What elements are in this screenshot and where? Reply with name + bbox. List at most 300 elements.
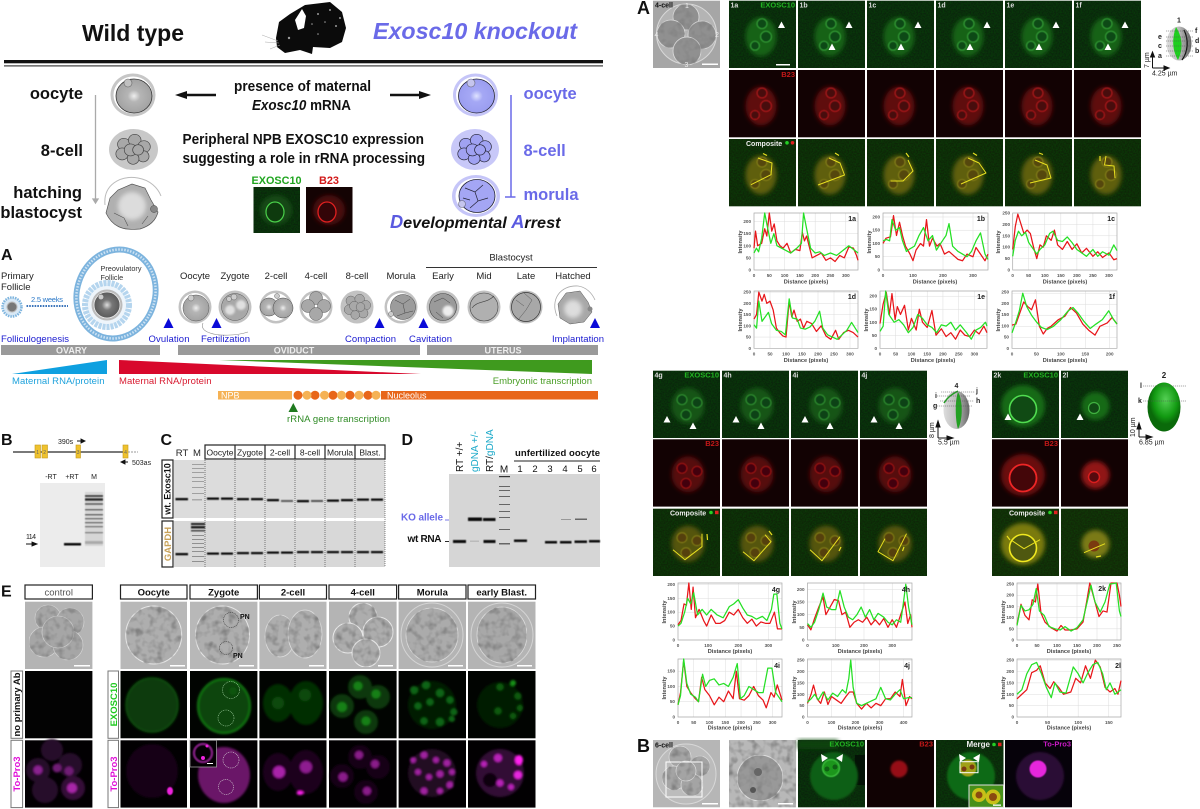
heading: Blastocyst: Blastocyst (489, 252, 533, 264)
icon: wild type 8-cell (109, 129, 158, 170)
icon: mid blastocyst (468, 290, 500, 324)
panel E: EXOSC10 immunostaining across stages (1, 584, 536, 808)
diagram: nucleus 4 slices: 4 (955, 383, 959, 390)
image: 4-cell embryo: 4-cell (655, 2, 673, 10)
profile chart: 2k: 150 (1073, 643, 1081, 648)
profile chart: 2k: 2k (1098, 586, 1106, 593)
chart: profile 1b: 0 (877, 268, 880, 272)
chart: profile 1f: 250 (1001, 290, 1009, 295)
chart: profile 4j (792, 658, 912, 732)
chart: profile 1b: 100 (872, 241, 880, 246)
image row: B23 series (729, 70, 1141, 137)
image: merge (936, 740, 1004, 807)
profile chart: 2k: 0 (1016, 643, 1019, 648)
chart: profile 4j: 100 (797, 692, 805, 697)
image row: EXOSC10 series 4g-4j: 4i (792, 372, 798, 380)
image: 4-cell embryo: 3 (685, 62, 689, 69)
diagram: gene model: 503as (132, 460, 152, 467)
labels: embryo stages: Oocyte (180, 271, 210, 282)
diagram: gene model (13, 439, 152, 467)
profile chart: 2l (1001, 658, 1121, 732)
chart: profile 1c: 50 (1005, 256, 1010, 261)
chart: profile 1f: 200 (1106, 351, 1114, 356)
profile chart: 2l: Distance (pixels) (1047, 726, 1091, 732)
labels: RT and M lanes: RT (176, 448, 188, 459)
chart: profile 1b: Intensity (867, 230, 873, 254)
chart: profile 1b (867, 213, 988, 286)
text: presence of maternal Exosc10 mRNA: Exosc10 mRNA (252, 97, 351, 114)
chart: profile 4j: 50 (799, 703, 805, 708)
labels: developmental events: Cavitation (409, 334, 452, 345)
icon: hatching blastocyst (105, 177, 161, 229)
profile chart: 2k: 150 (1006, 604, 1014, 609)
image row: EXOSC10 series 1a-1f: 1a (730, 2, 738, 10)
chart: profile 1c: 100 (1002, 245, 1010, 250)
chart: profile 1f: Distance (pixels) (1043, 358, 1087, 364)
chart: profile 1a: Distance (pixels) (784, 280, 828, 286)
chart: profile 1d: Distance (pixels) (784, 358, 828, 364)
panel letter E: E (1, 584, 12, 600)
chart: profile 4j: 4j (904, 663, 910, 670)
profile chart: 2l: 250 (1006, 658, 1014, 663)
chart: profile 4i: 150 (721, 720, 730, 725)
profile charts: 4g to 4j (662, 582, 912, 732)
headers: stages: 4-cell (351, 588, 375, 598)
arrow: 2.5 weeks: 2.5 weeks (31, 295, 63, 304)
labels: developmental events: Folliculogenesis (1, 334, 69, 345)
text: peripheral NPB expression: suggesting a role in rRNA processing (182, 150, 425, 167)
arrow: to wild type (175, 91, 216, 99)
panel letter A: A (1, 247, 13, 264)
labels: knockout stages: morula (524, 186, 579, 204)
chart: profile 1e: 50 (872, 333, 877, 338)
label: no primary Ab: no primary Ab (12, 672, 23, 737)
profile charts: 1a to 1f (738, 210, 1117, 364)
icon: 4-cell stage (300, 290, 332, 324)
text: Developmental Arrest: Developmental Arrest (390, 212, 561, 232)
bar: NPB to nucleolus (218, 391, 598, 401)
image row: EXOSC10 2k-2l (992, 370, 1128, 438)
icon: rRNA transcription marker (288, 403, 298, 412)
label: To-Pro3 control (11, 740, 23, 808)
image: B23: B23 (919, 740, 933, 748)
image row: EXOSC10 series 1a-1f: 1f (1076, 2, 1082, 10)
chart: profile 1e: 200 (869, 294, 877, 299)
chart: profile 1e: 50 (893, 351, 899, 356)
chart: profile 4j: Intensity (792, 676, 798, 700)
chart: profile 1e: 150 (869, 307, 877, 312)
chart: profile 1e: 300 (971, 351, 979, 356)
right panel A: nuclear series (637, 0, 1199, 364)
chart: profile 4j: 400 (900, 720, 908, 725)
image: 6-cell phase contrast (653, 740, 720, 807)
image: EXOSC10: EXOSC10 (829, 740, 864, 748)
right panel: nucleus 2 series (992, 370, 1186, 732)
labels: developmental events: Ovulation (148, 334, 190, 345)
wedge: embryonic transcription (219, 360, 592, 387)
chart: profile 4g: 150 (667, 596, 675, 601)
row: phase contrast images (25, 602, 536, 669)
text: peripheral NPB expression (182, 131, 425, 167)
labels: knockout stages (524, 85, 579, 204)
bar: uterus (427, 345, 598, 356)
chart: profile 4g: 0 (677, 643, 680, 648)
chart: profile 4g (662, 582, 782, 655)
chart: profile 1d: 250 (743, 290, 751, 295)
icon: mouse (262, 2, 346, 54)
chart: profile 1f: 50 (1034, 351, 1039, 356)
chart: profile 1a: 0 (753, 273, 756, 278)
heading: unfertilized oocyte: 6 (591, 464, 597, 475)
profile chart: 2k (1001, 582, 1121, 655)
chart: profile 1f: 150 (1001, 312, 1009, 317)
label: GAPDH (162, 521, 174, 567)
icon: hatched blastocyst (555, 286, 595, 324)
chart: profile 1b: 150 (872, 228, 880, 233)
embryo icons (178, 286, 595, 324)
gel: Exosc10 (174, 460, 385, 518)
chart: profile 4h: 0 (802, 638, 805, 642)
headers: stages: Zygote (208, 588, 239, 598)
chart: profile 1a: 150 (796, 273, 804, 278)
wedge: embryo maternal RNA: Maternal RNA/protein (119, 376, 212, 387)
chart: profile 1d: 1d (848, 294, 856, 301)
diagram: nucleus 1 slices: a (1158, 53, 1162, 60)
chart: profile 4i: 50 (670, 699, 675, 704)
bar: NPB to nucleolus: Nucleolus (387, 391, 427, 401)
chart: profile 1a: 200 (811, 273, 819, 278)
icon: morula stage (384, 290, 418, 324)
labels: D control lanes: M (500, 464, 508, 476)
image row: EXOSC10 series 1a-1f: 1d (938, 2, 946, 10)
labels: embryo stages: Hatched (555, 271, 591, 282)
chart: profile 1f: 1f (1109, 294, 1116, 301)
image: 4-cell embryo: 1 (685, 3, 689, 10)
headers: stage lanes: Oocyte (207, 448, 234, 458)
icon: wild type oocyte (110, 74, 156, 116)
chart: profile 1d (738, 290, 858, 364)
wedge: follicular maternal RNA (12, 360, 107, 387)
profile chart: 2l: 0 (1011, 714, 1014, 720)
profile chart: 2k: 50 (1034, 643, 1040, 648)
icon: 8-cell stage (340, 290, 374, 324)
diagram: nucleus 1 slices: c (1158, 43, 1162, 50)
labels: D control lanes (455, 429, 508, 476)
icon: knockout morula (452, 175, 500, 217)
panel letter D: D (402, 432, 413, 449)
image row: EXOSC10 series 4g-4j: 4g (654, 372, 663, 380)
chart: profile 4j: 0 (802, 714, 805, 720)
chart: profile 4g: 200 (667, 582, 675, 587)
labels: RT and M lanes (176, 448, 201, 459)
image row: EXOSC10 series 4g-4j: EXOSC10 (684, 370, 719, 380)
right panel B: 6-cell embryo (637, 736, 1072, 807)
profile chart: 2k: Distance (pixels) (1047, 649, 1091, 655)
chart: profile 1e: 100 (908, 351, 916, 356)
chart: profile 1f: 200 (1001, 301, 1009, 306)
headers: stage lanes: 8-cell (300, 448, 320, 458)
chart: profile 1d: 50 (767, 351, 773, 356)
chart: profile 4j: 150 (797, 680, 805, 685)
diagram: gene model: 2 (43, 450, 46, 456)
diagram: nucleus 1 slices (1144, 18, 1199, 78)
chart: profile 1f: Intensity (996, 308, 1002, 332)
diagram: nucleus 1 slices: b (1195, 48, 1199, 55)
image row: B23 2k-2l (992, 439, 1128, 507)
profile chart: 2k: 100 (1006, 615, 1014, 620)
chart: profile 1d: 250 (830, 351, 838, 356)
image row: composite series: Composite (746, 141, 782, 148)
image: enlarged phase contrast (729, 740, 796, 807)
bar: ovary (1, 345, 160, 356)
bar: uterus: UTERUS (484, 346, 522, 356)
profile chart: 2l: 50 (1045, 720, 1051, 725)
chart: profile 1b: 200 (872, 214, 880, 220)
heading: unfertilized oocyte: 5 (577, 464, 583, 475)
row: EXOSC10 fluorescence (25, 671, 536, 738)
labels: embryo stages (180, 271, 591, 282)
label: EXOSC10 row (108, 671, 120, 738)
labels: knockout stages: 8-cell (524, 142, 566, 160)
image: 6-cell phase contrast: 6-cell (655, 742, 673, 750)
gel: RT-PCR (40, 483, 105, 567)
image: EXOSC10 (798, 740, 865, 807)
chart: profile 4g: 300 (765, 643, 773, 648)
image: B23 nucleolus: B23 (319, 175, 339, 187)
icon: knockout oocyte (453, 74, 498, 116)
chart: profile 4j: 0 (806, 720, 809, 725)
chart: profile 1b: Distance (pixels) (913, 280, 957, 286)
chart: profile 1a: 50 (746, 256, 751, 260)
chart: profile 4i: 250 (753, 720, 761, 725)
diagram: nucleus 2 slices: 2 (1162, 371, 1167, 380)
chart: profile 1f: 150 (1081, 351, 1090, 356)
labels: gel B lanes (45, 474, 97, 481)
diagram: nucleus 2 slices: l (1140, 383, 1142, 390)
image: To-Pro3: To-Pro3 (1043, 740, 1071, 748)
image row: EXOSC10 2k-2l: EXOSC10 (1023, 370, 1058, 380)
arrow: 2.5 weeks (26, 295, 68, 306)
chart: profile 4i: 100 (706, 720, 714, 725)
chart: profile 1e: 250 (955, 351, 963, 356)
chart: profile 1d: Intensity (738, 308, 744, 332)
chart: profile 1b: 300 (969, 273, 977, 278)
heading: unfertilized oocyte: 2 (532, 464, 538, 475)
heading: unfertilized oocyte: 3 (547, 464, 553, 475)
image row: EXOSC10 series 4g-4j (653, 370, 927, 438)
chart: profile 4j: 100 (828, 720, 836, 725)
image row: EXOSC10 series 4g-4j: 4j (862, 372, 867, 380)
profile chart: 2k: 200 (1006, 593, 1014, 598)
headers: stage lanes: Blast. (359, 448, 381, 458)
chart: profile 4i: 4i (774, 663, 780, 670)
chart: profile 4g: 100 (667, 610, 675, 615)
profile chart: 2l: 150 (1105, 720, 1113, 725)
labels: D control lanes: RT/gDNA (485, 429, 496, 472)
diagram: nucleus 2 slices (1130, 371, 1186, 446)
panel letter B: B (1, 432, 13, 449)
chart: profile 4i: 50 (691, 720, 697, 725)
diagram: nucleus 2 slices: 6.85 µm (1139, 440, 1165, 446)
chart: profile 4j: 200 (797, 669, 805, 674)
image: 4-cell embryo: 2 (715, 32, 719, 39)
chart: profile 1d: 200 (814, 351, 822, 356)
chart: profile 4i: Intensity (662, 676, 668, 700)
chart: profile 1a: 50 (767, 273, 772, 278)
diagram: nucleus 1 slices: 4.25 µm (1152, 70, 1178, 78)
chart: profile 1a: 1a (848, 216, 856, 223)
chart: profile 4h: 200 (797, 587, 805, 592)
label: rRNA gene transcription: rRNA gene transcription (287, 414, 390, 425)
chart: profile 4g: 0 (672, 638, 675, 642)
chart: profile 4j: 200 (852, 720, 860, 725)
row: To-Pro3 fluorescence (25, 739, 536, 808)
chart: profile 1e: 0 (879, 351, 882, 356)
label: primary follicle: Follicle (1, 282, 31, 293)
icon: preovulatory follicle: Preovulatory (100, 264, 142, 273)
icons: event triangles (164, 318, 600, 328)
labels: embryo stages: 8-cell (346, 271, 368, 282)
labels: developmental events (1, 334, 604, 345)
icon: oocyte stage (178, 290, 212, 324)
headers: stages: early Blast. (476, 588, 527, 598)
diagram: nucleus 4 slices: i (935, 393, 937, 400)
label: wt. Exosc10: wt. Exosc10 (162, 463, 172, 516)
profile chart: 2k: 50 (1009, 626, 1014, 631)
chart: profile 4h: 300 (888, 643, 896, 648)
chart: profile 1c: 200 (1002, 222, 1010, 227)
image row: composite series 4: Composite (670, 510, 706, 518)
image row: EXOSC10 2k-2l: 2k (994, 372, 1001, 380)
chart: profile 4i: Distance (pixels) (708, 726, 752, 732)
labels: embryo stages: Late (517, 271, 535, 282)
row: phase contrast images: PN (233, 653, 243, 660)
chart: profile 1e: 1e (977, 294, 985, 301)
icon: knockout 8-cell (451, 129, 499, 170)
diagram: nucleus 4 slices: h (976, 398, 980, 405)
labels: D control lanes: gDNA +/- (470, 431, 481, 472)
heading: Wild type: Wild type (82, 20, 184, 46)
heading: unfertilized oocyte (514, 448, 600, 475)
chart: profile 1c: 200 (1073, 273, 1081, 278)
bar: ovary: OVARY (56, 346, 87, 356)
heading: unfertilized oocyte: unfertilized oocyte (515, 448, 600, 459)
chart: profile 4h (792, 583, 912, 655)
image row: EXOSC10 series 4g-4j: 4h (724, 372, 732, 380)
image row: composite series 4 (653, 509, 927, 576)
heading: unfertilized oocyte: 4 (562, 464, 568, 475)
label: To-Pro3 control: To-Pro3 (12, 756, 23, 792)
diagram: gene model: 3 (77, 450, 80, 456)
chart: profile 4g: 50 (670, 624, 675, 629)
chart: profile 4h: 0 (806, 643, 809, 648)
profile chart: 2k: 200 (1093, 643, 1101, 648)
chart: profile 4j: Distance (pixels) (838, 726, 882, 732)
chart: profile 4i: 0 (677, 720, 680, 725)
chart: profile 1a (738, 213, 858, 286)
chart: profile 1b: 200 (939, 273, 947, 278)
text: presence of maternal Exosc10 mRNA (234, 78, 371, 114)
wedge: embryo maternal RNA (119, 360, 421, 387)
labels: embryo stages: 2-cell (265, 271, 287, 282)
diagram: nucleus 4 slices: 8 µm (929, 422, 936, 438)
label: KO allele: KO allele (401, 512, 443, 524)
image row: EXOSC10 series 1a-1f: 1b (800, 2, 808, 10)
arrow: knockout block (505, 95, 516, 197)
image row: EXOSC10 series 1a-1f: 1e (1006, 2, 1014, 10)
chart: profile 1c (996, 210, 1117, 286)
icon: primary follicle (2, 298, 22, 316)
chart: profile 1d: 100 (782, 351, 790, 356)
chart: profile 1b: 50 (875, 254, 880, 259)
labels: knockout stages: oocyte (524, 85, 577, 103)
chart: profile 4i: 200 (737, 720, 745, 725)
diagram: nucleus 1 slices: d (1195, 38, 1199, 45)
chart: profile 1f: 100 (1057, 351, 1065, 356)
image row: composite series (729, 139, 1141, 206)
profile chart: 2l: 2l (1115, 663, 1121, 670)
chart: profile 1a: Intensity (738, 230, 744, 254)
labels: embryo stages: Mid (476, 271, 492, 282)
image: To-Pro3 (1005, 740, 1072, 807)
arrow: to knockout (390, 91, 431, 99)
chart: profile 1e: 150 (923, 351, 931, 356)
labels: embryo stages: Early (432, 271, 454, 282)
chart: profile 1e (864, 291, 987, 364)
image row: composite 2k-2l (992, 509, 1128, 576)
chart: profile 1c: 0 (1011, 273, 1014, 278)
text: presence of maternal Exosc10 mRNA: presence of maternal (234, 78, 371, 95)
image: B23 nucleolus (306, 175, 352, 233)
chart: profile 1c: 150 (1057, 273, 1065, 278)
label: 114 bp marker (26, 534, 37, 546)
image row: EXOSC10 2k-2l: 2l (1062, 372, 1068, 380)
headers: stage lanes: Morula (327, 448, 353, 458)
headers: stage lanes: Zygote (237, 448, 263, 458)
chart: profile 4h: 100 (832, 643, 840, 648)
image row: B23 series: B23 (781, 70, 795, 79)
chart: profile 1e: Intensity (864, 308, 870, 332)
chart: profile 1e: 0 (874, 346, 877, 351)
label: 8-cell (wild type): 8-cell (41, 142, 83, 160)
icon: preovulatory follicle: Follicle (100, 273, 123, 282)
chart: profile 1c: 250 (1089, 273, 1097, 278)
chart: profile 1d: 150 (798, 351, 806, 356)
diagram: nucleus 4 slices: j (975, 388, 978, 395)
headers: stages (25, 585, 536, 599)
image: EXOSC10 nucleolus (252, 175, 302, 233)
icon: early blastocyst (426, 290, 460, 324)
profile chart: 2l: Intensity (1001, 676, 1007, 700)
chart: profile 4h: 4h (902, 587, 910, 594)
chart: profile 1c: 100 (1041, 273, 1049, 278)
chart: profile 4i: 300 (769, 720, 777, 725)
chart: profile 1d: 200 (743, 301, 751, 306)
icon: sperm (202, 323, 248, 335)
panel C: stage RT-PCR gels (160, 432, 385, 567)
gel: genotyping (449, 474, 600, 567)
profile chart: 2l: 100 (1006, 692, 1014, 697)
chart: profile 4i (662, 659, 782, 732)
diagram: nucleus 4 slices (929, 383, 980, 446)
profile chart: 2k: 250 (1006, 582, 1014, 587)
text: peripheral NPB expression: Peripheral NPB EXOSC10 expression (182, 131, 424, 148)
chart: profile 1c: 50 (1026, 273, 1032, 278)
wedge: follicular maternal RNA: Maternal RNA/protein (12, 376, 104, 387)
headers: stage lanes: 2-cell (270, 448, 290, 458)
profile chart: 2k: 0 (1011, 638, 1014, 642)
chart: profile 4g: 200 (734, 643, 743, 648)
